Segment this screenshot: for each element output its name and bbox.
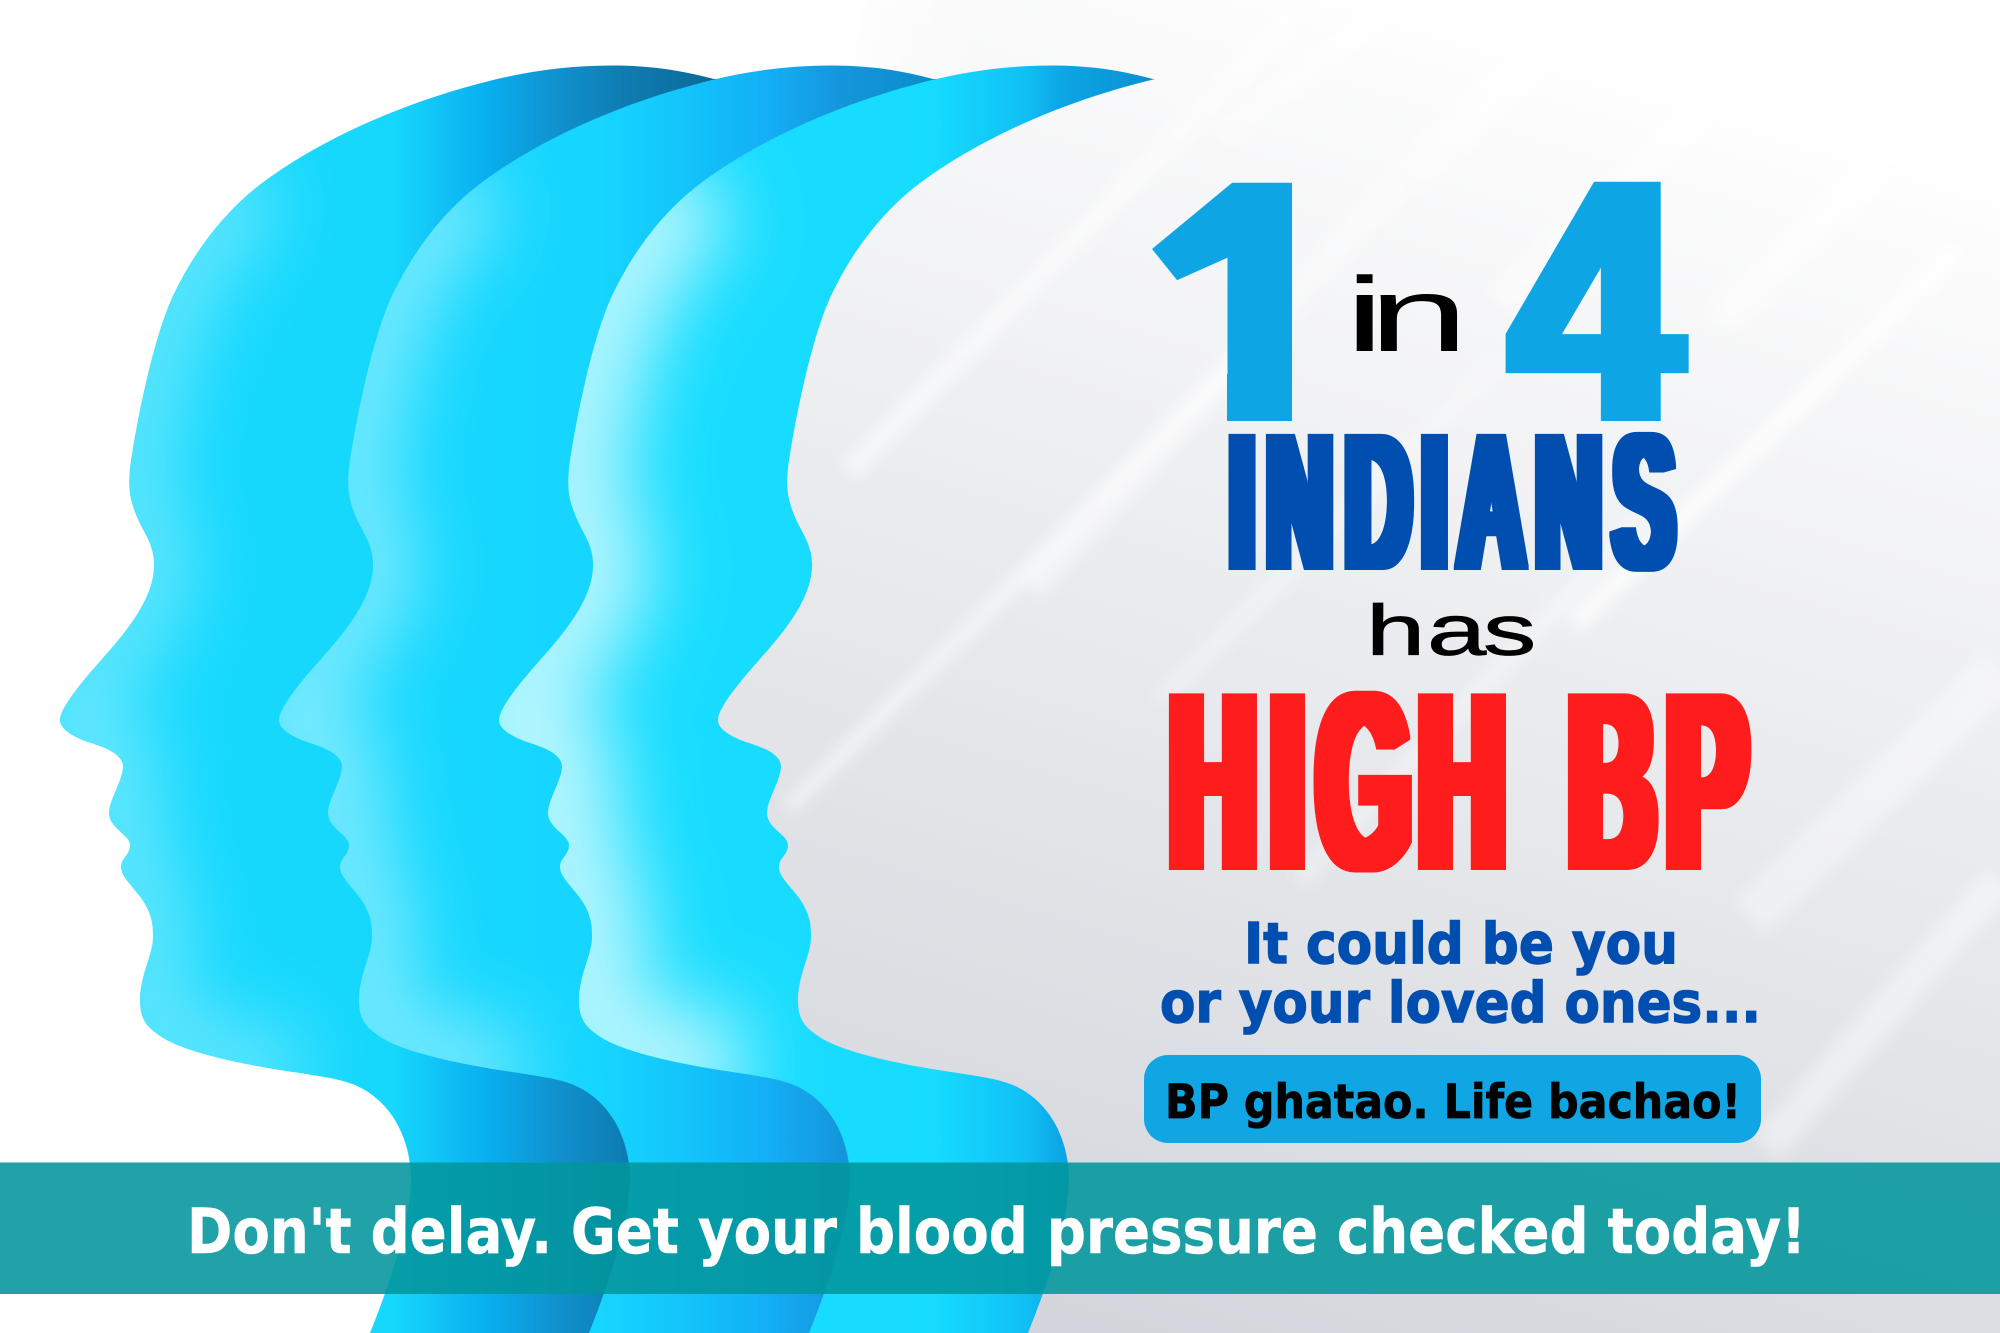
text block: it could be you: It could be you xyxy=(1244,912,1678,977)
text block: it could be you xyxy=(1160,912,1761,1036)
word INDIANS: INDIANS xyxy=(1229,394,1674,609)
three overlapping head silhouettes xyxy=(60,66,1155,1333)
word HIGH BP: HIGH BP xyxy=(1170,641,1746,922)
callout pill: BP ghatao xyxy=(1144,1055,1761,1143)
text block: it could be you: or your loved ones... xyxy=(1160,971,1761,1036)
head silhouette 3 xyxy=(499,66,1153,1333)
headline number 1: 1 xyxy=(1131,127,1385,491)
word in: in xyxy=(1345,256,1469,374)
callout pill: BP ghatao: BP ghatao. Life bachao! xyxy=(1165,1075,1741,1130)
bottom banner: Don't delay. Get your blood pressure checked today! xyxy=(187,1195,1806,1268)
word has: has xyxy=(1366,591,1536,671)
head silhouette 2 xyxy=(279,66,936,1333)
headline number 4: 4 xyxy=(1511,109,1682,492)
bottom banner xyxy=(0,1162,2000,1294)
head silhouette 1 xyxy=(60,66,716,1333)
